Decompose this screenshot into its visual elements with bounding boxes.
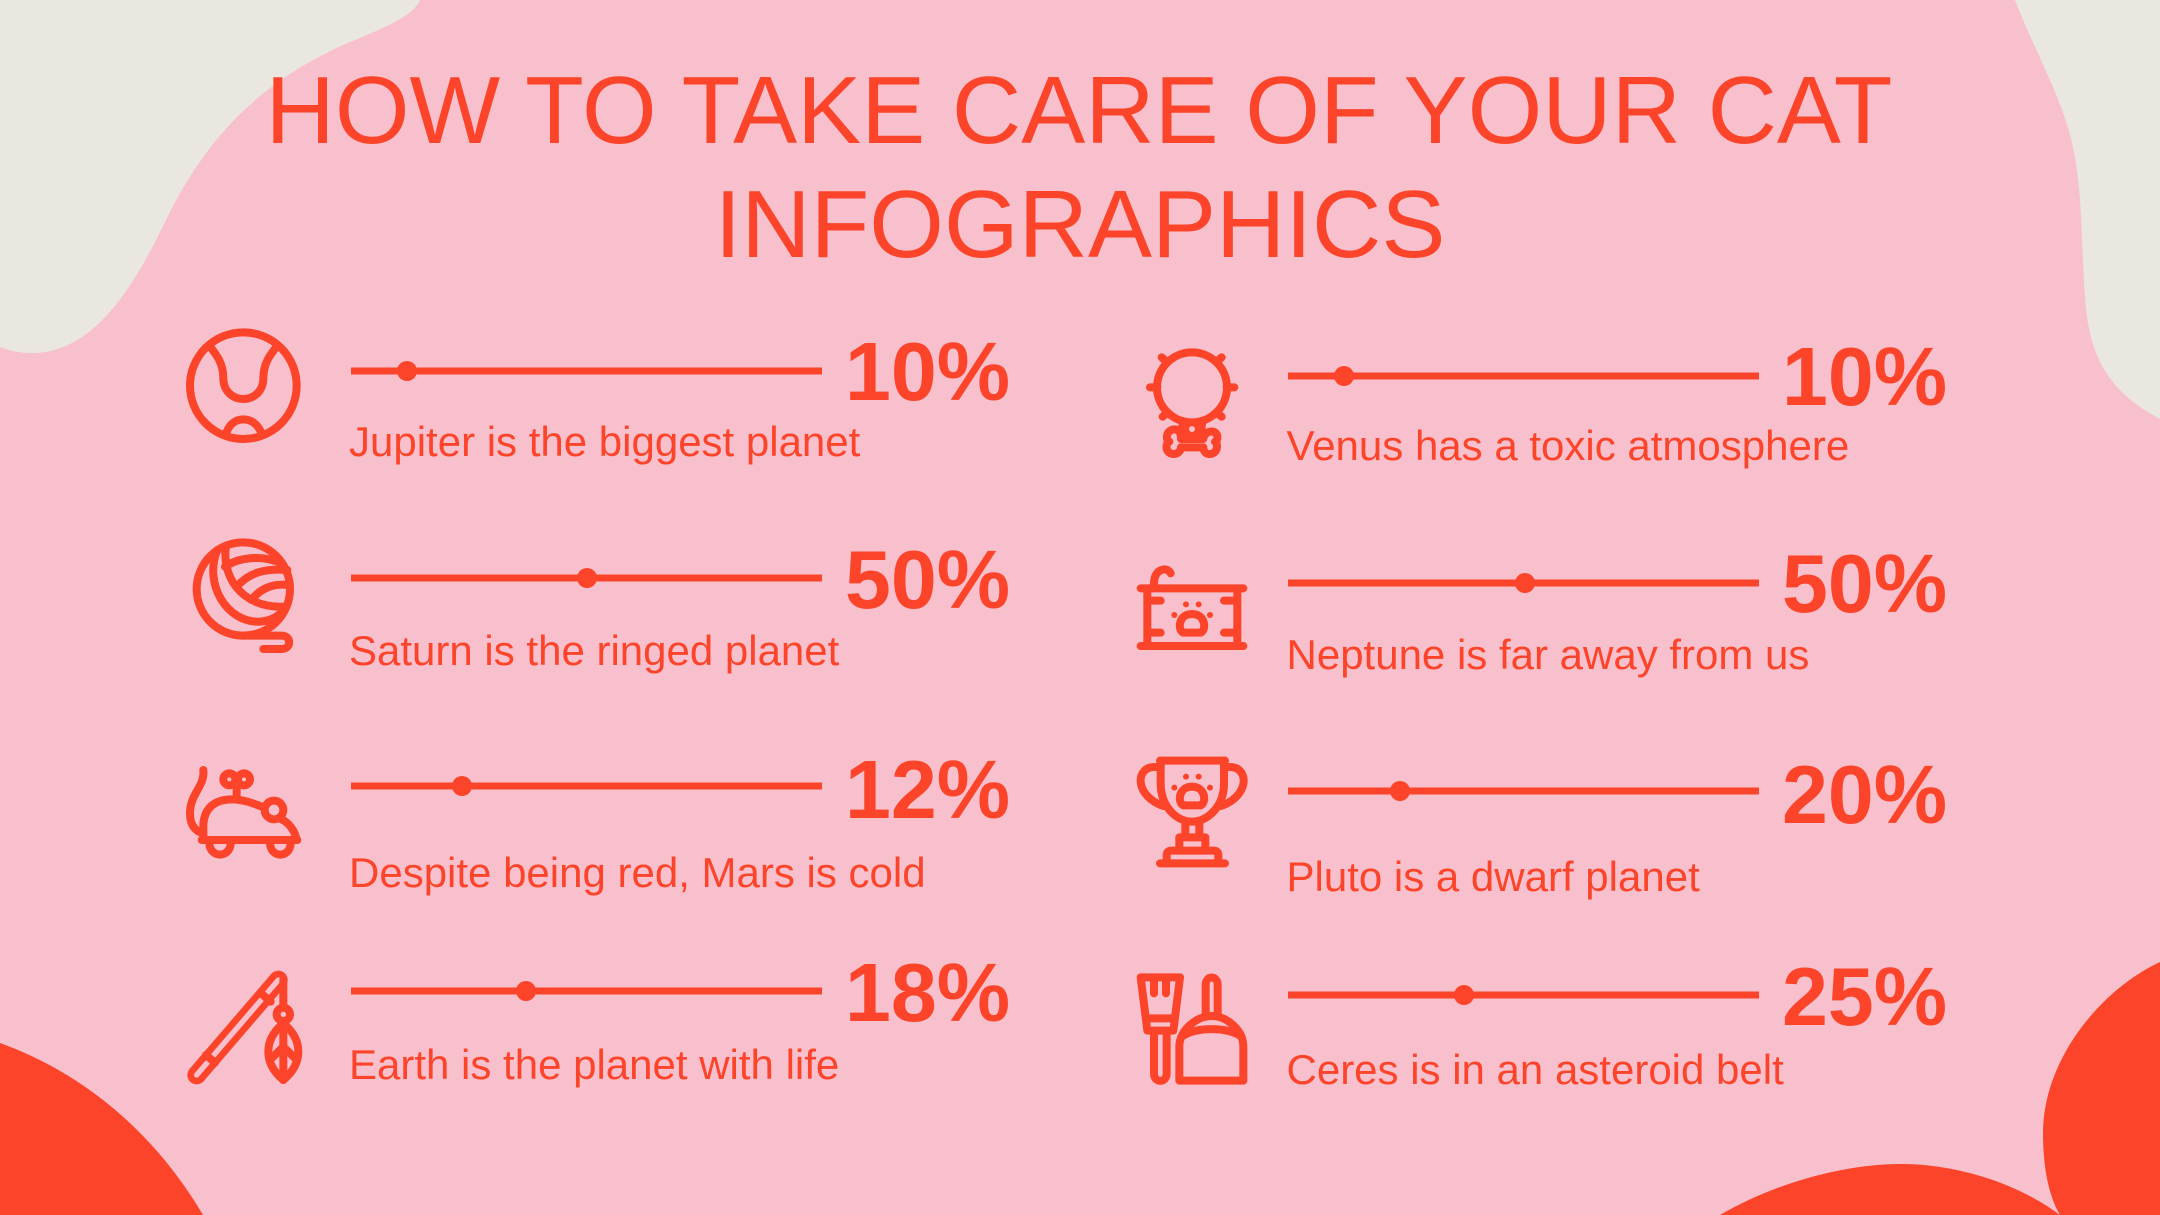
slider <box>1288 573 1759 593</box>
label: Jupiter is the biggest planet <box>349 418 861 465</box>
icon: feather wand <box>197 980 298 1080</box>
value: 10% <box>845 326 1010 418</box>
row: trophy 20% <box>1141 749 1947 900</box>
title <box>266 57 1892 278</box>
icon: yarn ball <box>197 542 290 649</box>
icon: brush and dustpan <box>1141 977 1243 1081</box>
red blob bottom right <box>2043 962 2160 1215</box>
value: 10% <box>1782 331 1947 423</box>
row: yarn ball 50% <box>197 534 1010 674</box>
label: Earth is the planet with life <box>349 1041 839 1088</box>
red blob bottom left <box>0 1043 203 1215</box>
icon: wind-up mouse <box>190 770 297 855</box>
icon: collar with bone tag <box>1150 352 1234 454</box>
icon: food tin with paw <box>1141 569 1243 646</box>
cream blob top left <box>0 0 420 353</box>
row: feather wand 18% <box>197 947 1010 1088</box>
slider <box>1288 366 1759 386</box>
value: 20% <box>1782 749 1947 841</box>
label: Saturn is the ringed planet <box>349 627 840 674</box>
red blob bottom centre right <box>1720 1164 2060 1215</box>
row: collar 10% <box>1150 331 1947 469</box>
label: Venus has a toxic atmosphere <box>1286 422 1849 469</box>
label: Ceres is in an asteroid belt <box>1286 1046 1784 1093</box>
label: Despite being red, Mars is cold <box>349 849 926 896</box>
title: HOW TO TAKE CARE OF YOUR CAT <box>266 57 1892 164</box>
row: toy mouse 12% <box>190 744 1010 896</box>
slider <box>1288 781 1759 801</box>
value: 50% <box>845 534 1010 626</box>
icon: tennis ball <box>190 332 297 439</box>
slider <box>351 361 822 381</box>
row: brush and dustpan 25% <box>1141 951 1947 1093</box>
slider <box>351 981 822 1001</box>
row: tennis ball 10% <box>190 326 1010 465</box>
slider <box>351 568 822 588</box>
value: 25% <box>1782 951 1947 1043</box>
icon: trophy with paw <box>1141 761 1244 863</box>
title: INFOGRAPHICS <box>715 171 1445 278</box>
cream blob top right <box>2015 0 2160 419</box>
label: Pluto is a dwarf planet <box>1286 853 1700 900</box>
label: Neptune is far away from us <box>1286 631 1809 678</box>
value: 18% <box>845 947 1010 1039</box>
value: 50% <box>1782 538 1947 630</box>
slider <box>351 776 822 796</box>
row: food bowl 50% <box>1141 538 1947 678</box>
slider <box>1288 985 1759 1005</box>
value: 12% <box>845 744 1010 836</box>
